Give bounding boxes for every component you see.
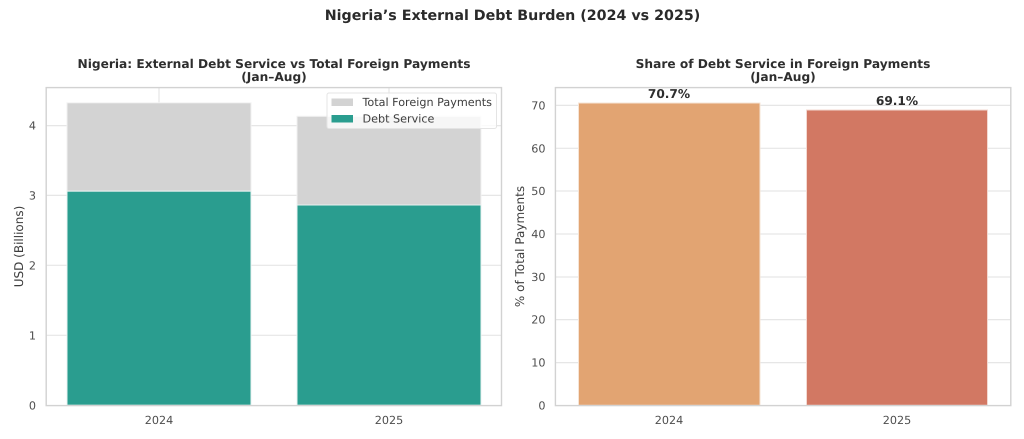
right y axis title: % of Total Payments (513, 186, 527, 307)
right y axis labels: 70 (531, 100, 546, 112)
left y axis labels: 1 (29, 330, 36, 342)
stacked bar 2024 (67, 103, 251, 405)
left x axis labels: 2024 (145, 414, 173, 427)
right y axis labels: 60 (531, 142, 546, 155)
right chart heading: (Jan–Aug) (750, 70, 816, 84)
right y axis labels: 0 (538, 400, 546, 412)
right chart heading: Share of Debt Service in Foreign Payments (636, 57, 930, 71)
bar 2024 (578, 103, 760, 405)
title: Nigeria’s External Debt Burden (2024 vs 2025) (325, 8, 700, 24)
left y axis labels: 0 (29, 400, 36, 412)
right y axis labels: 20 (531, 314, 546, 327)
right y axis labels: 10 (531, 357, 546, 370)
bar 2025 (806, 110, 988, 405)
left x axis labels (145, 414, 403, 427)
legend: Debt Service (362, 112, 435, 126)
right x axis labels: 2025 (883, 414, 911, 427)
right y axis labels: 40 (531, 228, 546, 241)
panel: share of debt service (513, 57, 1011, 427)
legend: Total Foreign Payments (362, 96, 492, 109)
panel: debt service vs total foreign payments (12, 57, 502, 427)
left chart heading: (Jan–Aug) (241, 70, 307, 84)
value label 2025: 69.1% (876, 94, 918, 108)
right chart heading (636, 57, 930, 84)
right x axis labels (655, 414, 911, 427)
left chart heading: Nigeria: External Debt Service vs Total Foreign Payments (78, 57, 470, 71)
left chart heading (78, 57, 470, 84)
left y axis labels: 3 (29, 190, 36, 202)
stacked bar 2025 (297, 116, 481, 405)
right x axis labels: 2024 (655, 414, 683, 427)
value label 2024: 70.7% (648, 87, 690, 101)
left y axis labels: 2 (29, 260, 36, 272)
left y axis title: USD (Billions) (12, 206, 26, 287)
right y axis labels: 30 (531, 271, 546, 284)
left y axis labels (29, 120, 36, 412)
right y axis labels: 50 (531, 185, 546, 198)
left x axis labels: 2025 (375, 414, 403, 427)
legend (327, 93, 496, 128)
left y axis labels: 4 (29, 120, 36, 133)
right y axis labels (531, 100, 546, 412)
